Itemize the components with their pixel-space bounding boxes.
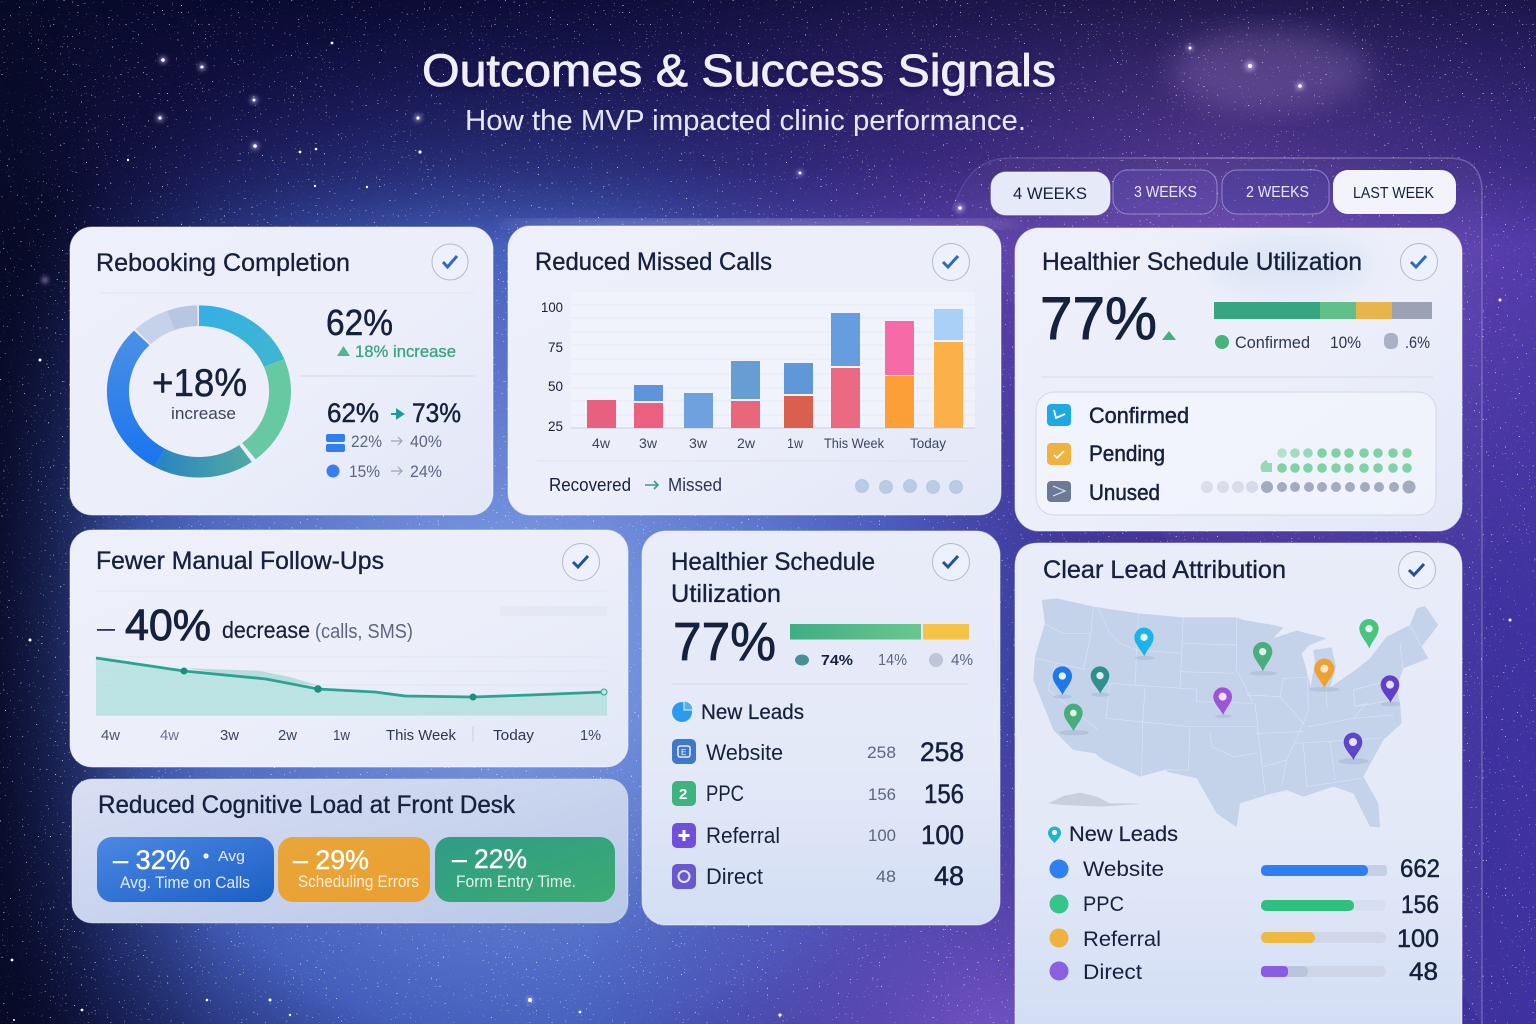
lead row: website: 258 [867,743,896,762]
icon: pending [1047,443,1071,465]
outer frame behind tabs [952,158,1482,1024]
bar legend [1215,333,1430,352]
stacked bar chart: 75 [548,339,563,355]
headline stat [97,601,413,650]
line chart: This Week [386,728,457,744]
chart legend: Recovered [549,475,631,495]
heading: Healthier Schedule [671,548,875,576]
panel: fewer manual follow-ups [70,530,628,767]
source row: ppc [1050,891,1439,919]
status list: Pending [1089,441,1165,466]
panel: rebooking completion [70,227,493,515]
icon: check badge [432,244,468,280]
source row: website: Website [1083,858,1164,881]
bar legend: Confirmed [1235,334,1310,352]
bar legend: .6% [1405,334,1430,352]
panel: reduced missed calls [508,226,1001,515]
pin: purple [1213,687,1232,715]
lead row: direct [672,861,964,891]
status list: Confirmed [1089,403,1189,428]
source row: direct [1050,958,1438,986]
icon: unused [1047,481,1071,502]
comparison stats: 73% [412,398,461,428]
donut chart: +18% [152,362,247,405]
line chart: Today [493,728,535,744]
chart legend: Missed [668,475,722,495]
stacked bar chart: 3w [639,435,658,451]
lead row: direct: 48 [876,867,896,886]
heading: Rebooking Completion [96,249,350,277]
pin: indigo east [1381,675,1399,703]
lead row: direct: Direct [706,864,763,889]
panel: reduced cognitive load [72,779,628,923]
bar legend: 10% [1330,334,1361,352]
source row: ppc: PPC [1083,893,1124,916]
stacked bar chart: 3w [689,435,708,451]
tab: 4 weeks [991,172,1110,215]
lead row: ppc: 156 [868,785,896,804]
headline stat: 40% [125,601,211,650]
line chart: 1w [333,728,350,744]
source row: direct: 48 [1409,958,1438,986]
heading: Clear Lead Attribution [1043,556,1286,584]
icon: check badge [932,544,970,580]
stat tile: scheduling errors: Scheduling Errors [298,873,419,891]
headline stat [326,302,456,361]
headline stat: (calls, SMS) [315,621,413,643]
stat tile: time on calls: – 32% [113,845,190,875]
stacked bar chart: Today [910,435,946,451]
stacked bar chart: 2w [737,435,756,451]
line chart [96,657,607,744]
source row: website: 662 [1400,855,1440,883]
source row: referral: 100 [1397,925,1439,953]
subtitle: How the MVP impacted clinic performance. [465,105,1026,137]
pin: orange [1314,659,1334,688]
bar legend: 74% [821,652,853,669]
source row: referral [1050,925,1439,953]
lead row: referral: Referral [706,823,780,848]
stat tile: form entry time: Form Entry Time. [456,873,576,891]
legend heading: New Leads [1069,823,1178,846]
stacked bar chart: 1w [787,435,804,451]
chart legend [549,475,962,495]
stat tile: form entry time: – 22% [452,844,527,874]
pin shadows [1053,656,1401,764]
stat tile: scheduling errors: – 29% [293,845,369,875]
status list: Unused [1089,480,1160,505]
stacked bar chart: 100 [541,299,563,315]
tab: last week: LAST WEEK [1353,185,1434,202]
pin: green south [1064,704,1083,731]
stat tile: time on calls: Avg [218,849,245,865]
panel: healthier schedule utilization and new leads [642,531,1000,925]
stacked bar chart: 50 [548,378,563,394]
line chart: 3w [220,728,240,744]
dot matrix [1201,448,1416,494]
lead row: referral [672,820,964,850]
pin: cyan [1134,628,1154,656]
status list [1036,392,1436,515]
line chart: 4w [160,728,180,744]
bar legend: 14% [878,652,907,669]
headline stat: decrease [222,617,310,643]
comparison stats: 22% [351,432,382,451]
stacked bar chart [541,292,975,451]
utilization bar [1214,302,1432,319]
tab: 4 weeks: 4 WEEKS [1013,184,1087,203]
icon: confirmed [1047,404,1071,426]
lead row: direct: 48 [934,861,964,891]
tab: 2 weeks [1222,170,1329,214]
pin: indigo south [1344,733,1362,760]
heading: Reduced Cognitive Load at Front Desk [98,791,515,819]
lead row: ppc: 2 [679,786,687,803]
heading [671,548,875,608]
line chart: 4w [101,728,121,744]
comparison stats: 15% [349,462,380,481]
source row: ppc: 156 [1401,891,1439,919]
heading: Fewer Manual Follow-Ups [96,547,384,575]
comparison stats: 62% [327,398,379,428]
pin: green central [1253,642,1272,672]
bar legend: 4% [951,652,973,669]
stat tile: time on calls: Avg. Time on Calls [120,874,250,892]
lead row: website: Website [706,740,783,765]
tab: last week [1333,170,1456,214]
heading: Healthier Schedule Utilization [1042,248,1362,276]
heading: Reduced Missed Calls [535,248,772,276]
bright star glows [42,45,1304,1003]
stacked bar chart: This Week [824,435,885,451]
title: Outcomes & Success Signals [422,45,1056,96]
stacked bar chart: 4w [592,435,611,451]
icon: check badge [1400,244,1438,280]
tab: 3 weeks: 3 WEEKS [1134,184,1197,201]
big stat: 77% [1040,285,1157,352]
lead row: website: 258 [920,737,964,767]
lead row: referral: 100 [868,826,896,845]
bar legend [795,652,973,669]
tab: 3 weeks [1113,170,1217,214]
source row: direct: Direct [1083,961,1142,984]
time range tabs [991,170,1456,215]
new leads subheading: New Leads [701,701,804,724]
line chart: 1% [580,728,601,744]
stat tile: scheduling errors [278,837,430,902]
icon: check badge [562,544,600,580]
comparison stats: 40% [410,432,442,451]
lead row: referral: 100 [921,820,964,850]
comparison stats [326,398,461,481]
pin: green northeast [1359,619,1379,649]
lead row: ppc: PPC [706,781,744,806]
heading: Utilization [671,580,781,608]
panel: clear lead attribution [1015,543,1462,1024]
donut chart: increase [171,404,236,423]
line chart: 2w [278,728,298,744]
icon: check badge [1398,552,1436,588]
donut chart [118,316,280,467]
tab: 2 weeks: 2 WEEKS [1246,184,1309,201]
lead row: website [672,737,964,767]
stacked bar chart: 25 [548,418,563,434]
stat tile: form entry time [435,837,615,902]
US map with location pins [1033,598,1438,827]
utilization bar [790,624,969,640]
source row: referral: Referral [1083,928,1161,951]
map outline [1033,598,1438,827]
headline stat: 18% increase [355,342,456,361]
lead row: website: E [681,748,686,757]
icon: check badge [932,244,970,280]
pin: teal [1091,666,1109,694]
pin: blue [1053,666,1072,695]
headline stat: 62% [326,302,393,343]
comparison stats: 24% [410,462,442,481]
lead row: ppc [672,779,964,809]
big stat: 77% [673,612,776,672]
panel: healthier schedule utilization (top) [1015,228,1462,531]
lead row: ppc: 156 [924,779,964,809]
source row: website [1050,855,1440,883]
stat tile: time on calls [97,837,274,902]
